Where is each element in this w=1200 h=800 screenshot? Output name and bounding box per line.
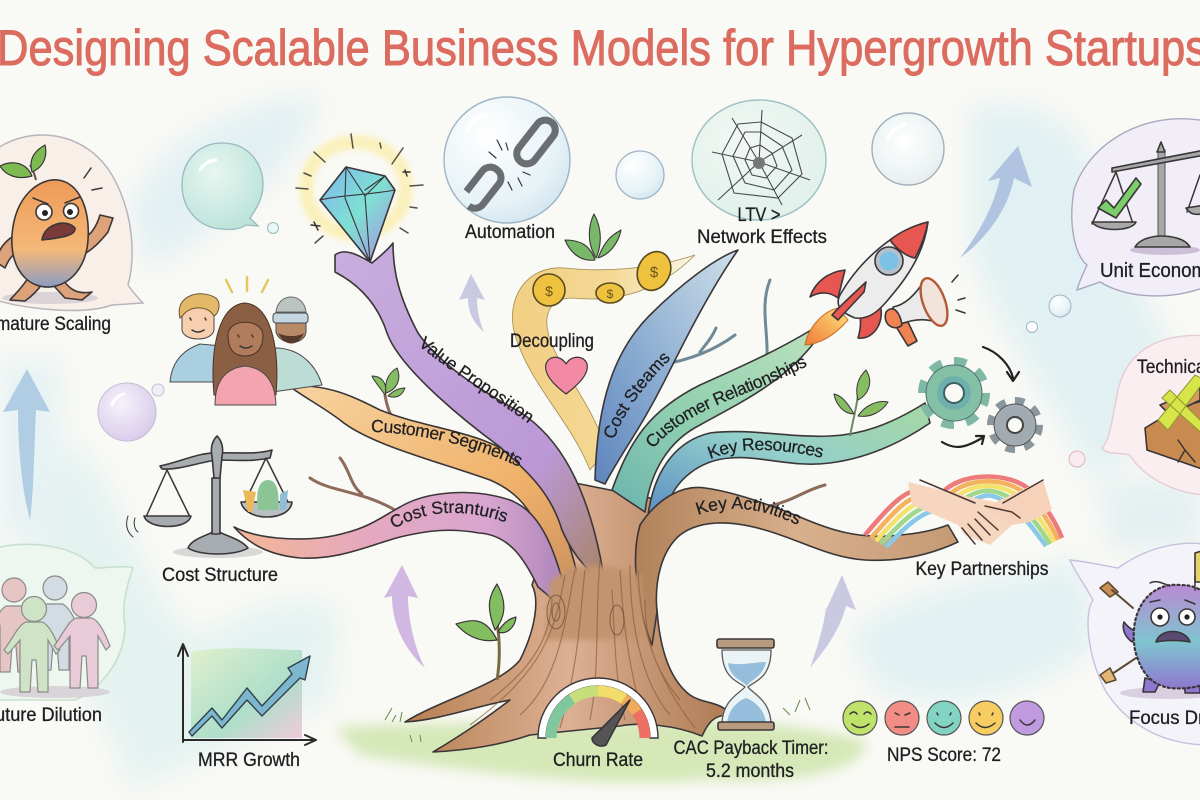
icon: sapling bbox=[456, 584, 516, 680]
bubble: teal speech bbox=[182, 143, 278, 234]
twigs bbox=[310, 395, 825, 510]
bubble: iridescent bbox=[872, 113, 944, 185]
branch: value proposition bbox=[335, 243, 606, 590]
bubble: network effects bbox=[692, 100, 826, 220]
trunk grain and knots bbox=[470, 560, 695, 728]
branch labels: Customer Segments bbox=[372, 420, 522, 466]
label: LTV and network effects: Network Effects bbox=[697, 227, 827, 248]
icon: faded people bbox=[0, 576, 110, 692]
icon: gears bbox=[923, 347, 1039, 449]
person right bbox=[272, 297, 322, 392]
branch labels: Key Activities bbox=[696, 496, 800, 524]
icon: NPS smileys bbox=[843, 701, 1044, 735]
branch: cost structure bbox=[234, 493, 572, 622]
smiley yellow bbox=[969, 701, 1003, 735]
icon: rainbow and handshake bbox=[865, 476, 1062, 547]
branch labels: Key Resources bbox=[707, 438, 823, 459]
label: LTV and network effects: LTV > bbox=[738, 205, 780, 226]
label: CAC payback timer: CAC Payback Timer: bbox=[674, 738, 828, 759]
area bbox=[191, 648, 302, 738]
trunk blend over branch tips bbox=[545, 565, 648, 640]
panel: premature scaling bbox=[0, 135, 143, 335]
gauge: churn rate bbox=[538, 678, 658, 746]
icon: angry monster bbox=[0, 145, 113, 301]
icon: cost structure scale bbox=[127, 436, 292, 558]
person left bbox=[170, 294, 225, 382]
label: NPS score: NPS Score: 72 bbox=[887, 745, 1001, 766]
bubble: small pink bbox=[1069, 451, 1085, 467]
icon: hourglass bbox=[717, 639, 774, 730]
ground bbox=[335, 720, 865, 783]
tree bbox=[233, 242, 959, 753]
label: cost structure: Cost Structure bbox=[162, 565, 278, 586]
label: CAC payback timer bbox=[674, 738, 828, 782]
trunk and roots bbox=[405, 480, 732, 752]
arrow: lavender right bbox=[810, 575, 856, 668]
icon: coins and sapling bbox=[533, 214, 677, 306]
branch: key resources bbox=[648, 403, 930, 515]
bubble: automation bbox=[444, 97, 570, 223]
panel: focus drain bbox=[1070, 543, 1200, 745]
icon: people group bbox=[170, 294, 322, 405]
icon: fuzzy monster bbox=[1123, 576, 1200, 693]
branch: cost streams bbox=[595, 250, 738, 484]
icon: coins and sapling: $ bbox=[650, 264, 659, 281]
bubble: small blue bbox=[616, 151, 664, 199]
label: decoupling: Decoupling bbox=[510, 331, 594, 352]
speech bubble bbox=[0, 135, 143, 310]
trend arrow bbox=[189, 656, 310, 736]
icon: spider web bbox=[712, 110, 810, 205]
branch labels: Cost Stranturis bbox=[390, 501, 508, 527]
sapling on key resources bbox=[834, 370, 888, 436]
branch labels: Cost Steams bbox=[604, 354, 670, 438]
shadow bbox=[2, 292, 98, 304]
label: CAC payback timer: 5.2 months bbox=[706, 761, 794, 782]
bubble: lilac bbox=[98, 383, 164, 441]
label: LTV and network effects bbox=[697, 205, 827, 248]
person centre bbox=[213, 303, 277, 405]
smiley teal bbox=[927, 701, 961, 735]
label: MRR growth: MRR Growth bbox=[198, 750, 300, 771]
icon: balance scale with check bbox=[1092, 142, 1200, 255]
icon: toolbox bbox=[1145, 375, 1200, 470]
icon: coins and sapling: $ bbox=[607, 287, 614, 301]
label: churn rate: Churn Rate bbox=[553, 750, 643, 771]
smiley green bbox=[843, 701, 877, 735]
icon: coins and sapling: $ bbox=[545, 283, 553, 299]
icon: broken chain bbox=[460, 116, 559, 212]
icon: grass tufts bbox=[385, 698, 810, 742]
branch labels bbox=[372, 336, 823, 527]
icon: rocket bbox=[805, 222, 928, 345]
panel: future dilution bbox=[0, 544, 133, 726]
arrow: blue left bbox=[3, 369, 50, 520]
icon: megaphone bbox=[885, 275, 965, 346]
panel: unit economics bbox=[1072, 119, 1200, 296]
branch: customer relationships bbox=[612, 318, 830, 512]
axes bbox=[178, 644, 316, 745]
branch: yellow decoupling bbox=[512, 255, 695, 470]
branch: customer segments bbox=[288, 385, 585, 610]
icon: glowing diamond bbox=[296, 134, 423, 262]
label: automation: Automation bbox=[465, 222, 555, 243]
label: key partnerships: Key Partnerships bbox=[916, 559, 1048, 580]
icon: dart arrows bbox=[1100, 550, 1200, 683]
panel: technical debt bbox=[1102, 335, 1200, 495]
rotation arrows bbox=[942, 347, 1019, 447]
bubbles: small pair bbox=[1026, 295, 1071, 332]
icon: heart bbox=[546, 357, 587, 394]
icon: idea rays bbox=[226, 277, 268, 292]
arrow: lavender near automation bbox=[459, 274, 485, 332]
smiley purple bbox=[1010, 701, 1044, 735]
arrow: blue top right bbox=[960, 146, 1032, 258]
chart: MRR growth bbox=[178, 644, 316, 745]
smiley red bbox=[885, 701, 919, 735]
branch labels: Value Proposition bbox=[422, 336, 532, 424]
branch: key activities bbox=[636, 487, 958, 645]
branch labels: Customer Relationships bbox=[646, 358, 806, 446]
arrow: purple centre bbox=[384, 565, 425, 668]
sapling on customer segments bbox=[372, 368, 405, 397]
